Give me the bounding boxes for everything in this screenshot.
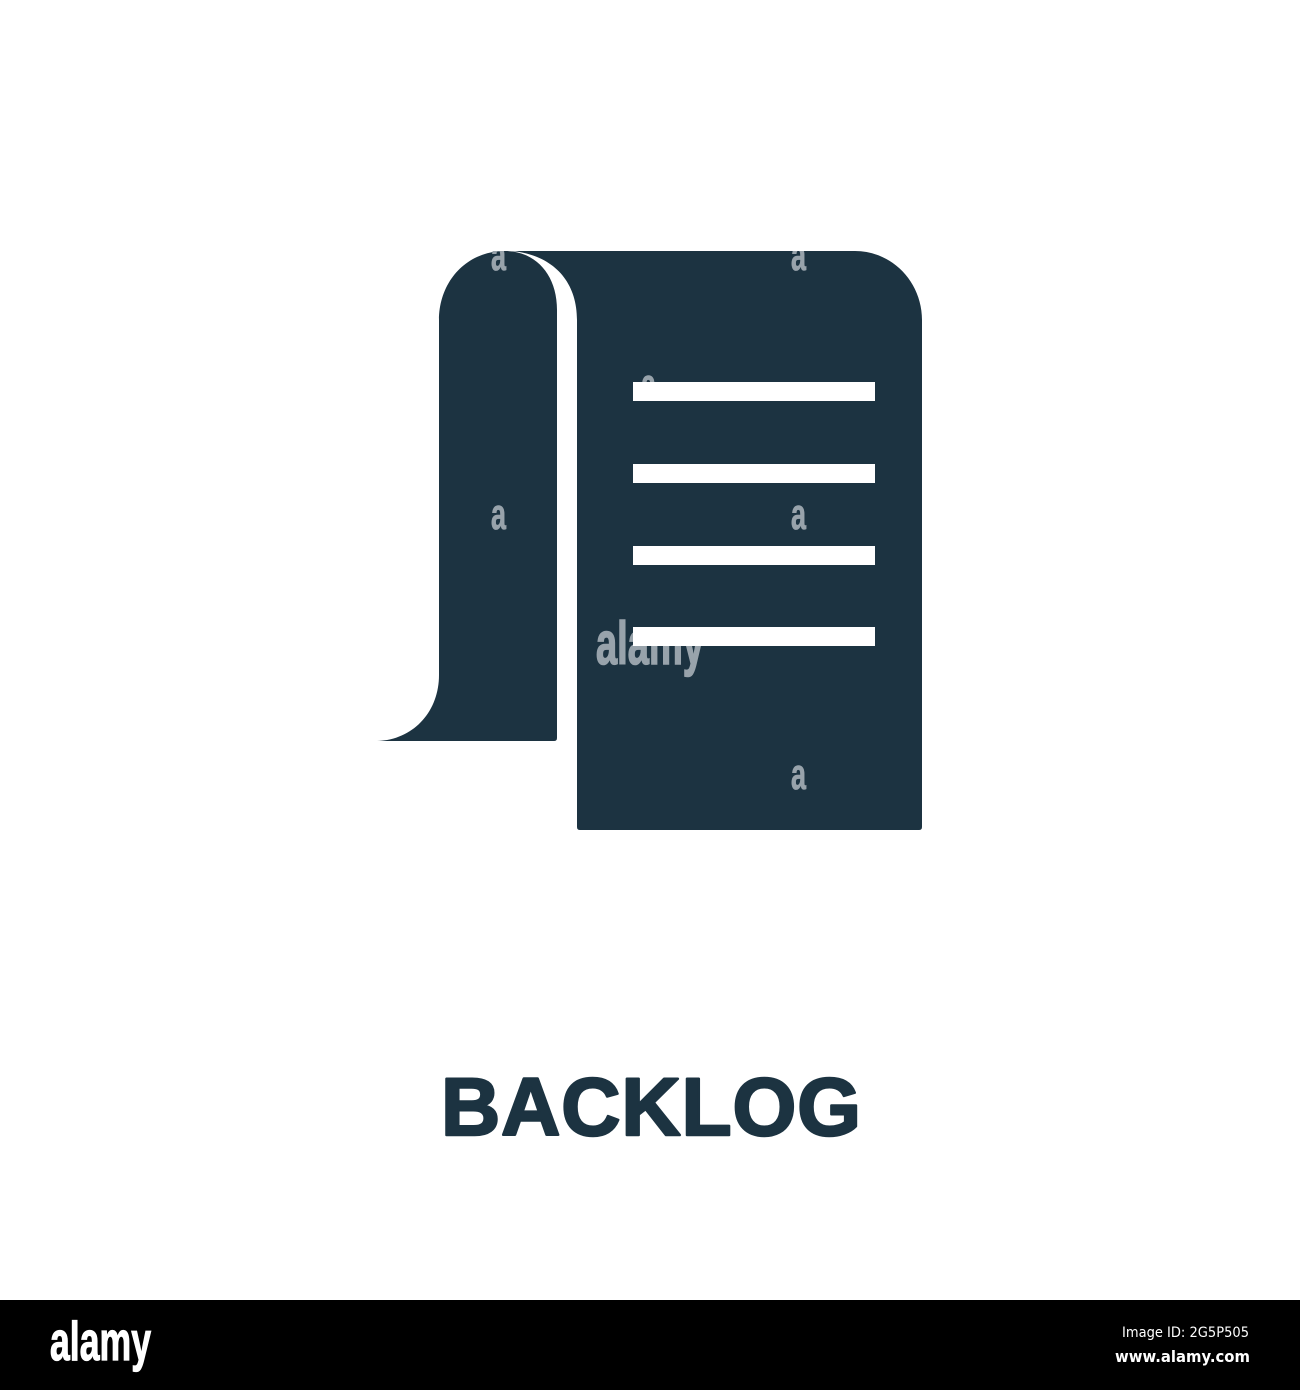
folded left strip of the scroll (377, 251, 557, 741)
watermark marks on icon: a (791, 231, 806, 280)
title: BACKLOG (441, 1062, 861, 1153)
website url: www.alamy.com (1115, 1347, 1250, 1366)
main document page (512, 251, 922, 830)
watermark marks on icon: a (491, 490, 506, 539)
watermark marks on icon: alamy (596, 610, 704, 677)
watermark marks on icon: a (791, 750, 806, 799)
watermark marks on icon: a (641, 360, 656, 409)
watermark marks on icon (491, 231, 806, 799)
footer bar (0, 1300, 1300, 1390)
watermark marks on icon: a (791, 490, 806, 539)
icon: backlog document scroll (377, 225, 922, 830)
watermark marks on icon: a (491, 231, 506, 280)
text lines on the document (633, 382, 875, 646)
image id: Image ID: 2G5P505 (1122, 1325, 1249, 1341)
footer logo: alamy (50, 1310, 151, 1372)
